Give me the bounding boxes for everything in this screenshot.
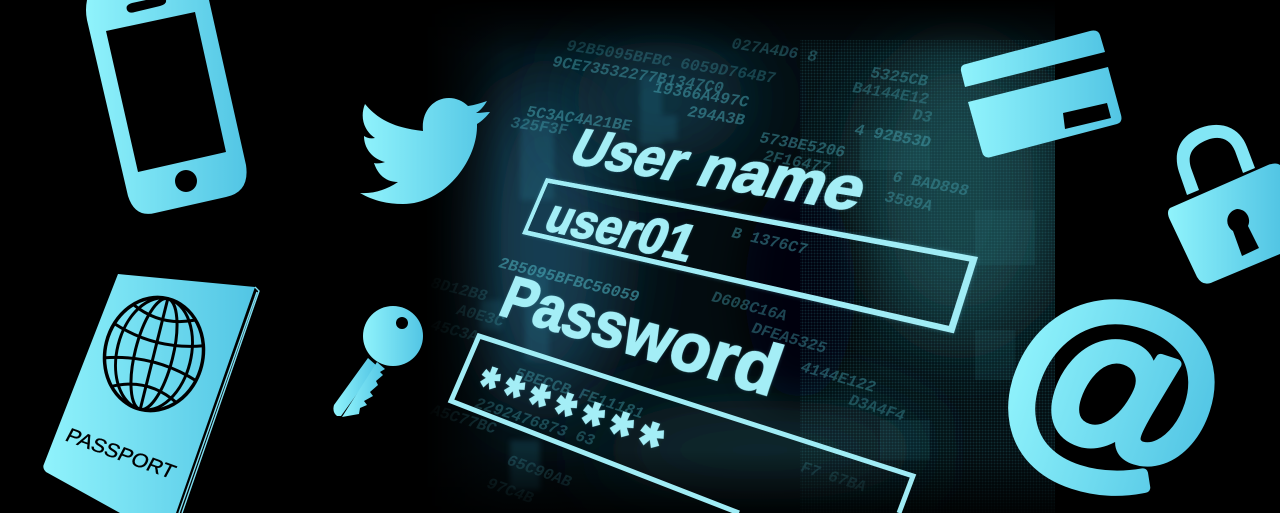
panel: digital code background xyxy=(434,17,1055,513)
heading: User name: User name xyxy=(561,119,880,224)
code rows: D3 xyxy=(911,106,934,127)
code rows: 19366A497C xyxy=(652,79,750,112)
code rows xyxy=(428,35,970,508)
code rows: A0E3C xyxy=(454,301,506,331)
code rows: D608C16A xyxy=(710,288,789,326)
icon: key xyxy=(333,306,423,417)
icon: passport xyxy=(43,274,259,513)
code rows: 027A4D6 8 xyxy=(730,35,819,67)
code rows: 92B5095BFBC 6059D764B7 xyxy=(565,37,777,88)
icon: smartphone xyxy=(86,0,247,214)
code rows: 6 BAD898 xyxy=(891,168,970,201)
code rows: B 1376C7 xyxy=(730,224,809,259)
code rows: 4144E122 xyxy=(799,359,878,397)
dot screen xyxy=(800,40,1055,513)
login form plane xyxy=(467,119,979,485)
code rows: D3A4F4 xyxy=(847,392,907,426)
code rows: 2292476873 63 xyxy=(472,395,597,450)
passport label: PASSPORT xyxy=(62,425,179,483)
code rows: 3589A xyxy=(883,188,934,216)
code rows: 4 92B53D xyxy=(853,121,932,152)
input value: masked password: ******* xyxy=(467,354,681,485)
code rows: B4144E12 xyxy=(851,79,930,109)
code rows: 45C3A xyxy=(429,316,480,346)
code rows: 5BECCB FE11181 xyxy=(512,365,646,423)
edge fades xyxy=(425,28,500,486)
code rows: 325F3F xyxy=(509,114,569,140)
code rows: 97C4B xyxy=(484,475,536,508)
code rows: DFEA5325 xyxy=(750,320,829,358)
icon: padlock xyxy=(1168,125,1280,284)
input value: user01: user01 xyxy=(537,190,706,272)
code rows: 2B5095BFBC56059 xyxy=(497,254,641,307)
code rows: 65C90AB xyxy=(504,452,574,492)
data blocks xyxy=(480,75,677,490)
code rows: 8D12B8 xyxy=(429,274,489,306)
code rows: 5325CB xyxy=(869,64,929,91)
code rows: A5C77BC xyxy=(428,401,498,439)
code rows: 5C3AC4A21BE xyxy=(525,103,633,136)
code rows: 2F16477 xyxy=(762,147,832,178)
globe xyxy=(93,287,215,421)
heading: Password: Password xyxy=(491,264,793,411)
icon: credit card xyxy=(961,30,1122,157)
input box: password xyxy=(451,336,913,513)
code rows: F7 67BA xyxy=(798,459,868,497)
icon: twitter bird xyxy=(360,98,490,204)
code rows: 294A3B xyxy=(686,103,746,130)
code rows: 9CE73532277B1347C0 xyxy=(551,53,725,98)
input box: user name xyxy=(522,178,978,333)
code rows: 573BE5206 xyxy=(758,129,847,162)
